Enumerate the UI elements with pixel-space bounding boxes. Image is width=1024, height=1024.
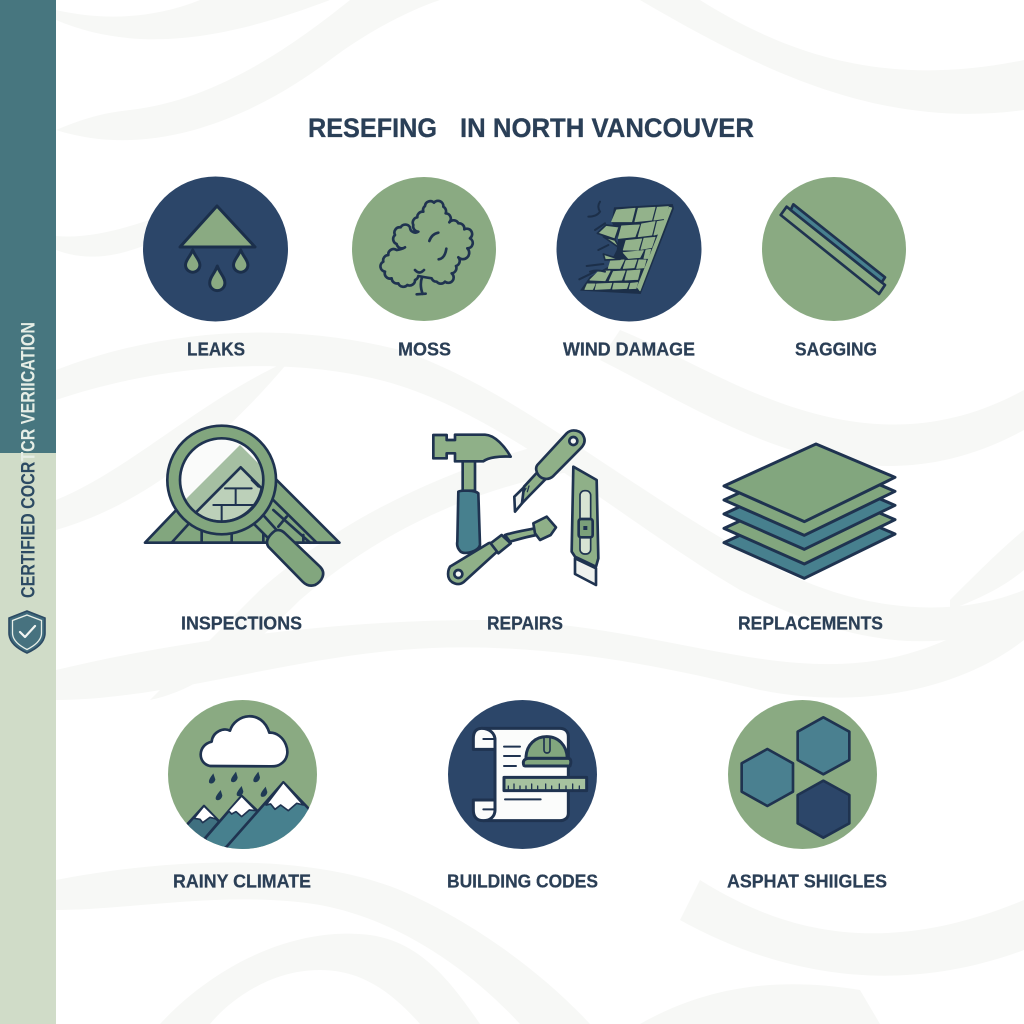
item: wind damage xyxy=(556,176,702,360)
title: RESEFING xyxy=(308,113,437,143)
item: repairs xyxy=(433,430,598,634)
label: repairs: REPAIRS xyxy=(487,614,563,634)
label: sagging: SAGGING xyxy=(795,340,877,360)
item: leaks xyxy=(143,176,288,360)
box cutter xyxy=(572,467,598,585)
icon: cloud rain and mountains xyxy=(168,700,317,857)
sidebar vertical text: CERTIFIED COCRTCR VERIICATION xyxy=(18,322,40,598)
label: moss: MOSS xyxy=(398,340,451,360)
label: inspections: INSPECTIONS xyxy=(181,614,302,634)
label: replacements: REPLACEMENTS xyxy=(738,614,883,634)
title xyxy=(308,113,754,143)
icon: moss tree xyxy=(352,177,496,321)
icon: torn shingles xyxy=(556,176,702,322)
item: replacements xyxy=(724,444,895,634)
icon: code scroll with hard hat and ruler xyxy=(448,700,597,849)
item: inspections xyxy=(145,426,339,634)
title: IN NORTH VANCOUVER xyxy=(460,113,754,143)
label: building codes: BUILDING CODES xyxy=(447,872,598,892)
icon: repair tools xyxy=(433,430,598,585)
icon: roof with water drops xyxy=(143,176,288,322)
label: leaks: LEAKS xyxy=(187,340,245,360)
sidebar: certified verification xyxy=(0,0,56,1024)
icon: hexagon shingles xyxy=(728,700,877,849)
label: rainy climate: RAINY CLIMATE xyxy=(173,872,311,892)
item: rainy climate xyxy=(168,700,317,892)
icon: sagging beam xyxy=(762,177,906,321)
item: asphalt shingles xyxy=(727,700,887,892)
label: asphalt shingles: ASPHAT SHIIGLES xyxy=(727,872,887,892)
icon: shield with check xyxy=(9,611,45,653)
hammer xyxy=(433,435,511,553)
item: moss xyxy=(352,177,496,360)
item: sagging xyxy=(762,177,906,360)
item: building codes xyxy=(447,700,598,892)
label: wind damage: WIND DAMAGE xyxy=(563,340,695,360)
icon: stacked shingle layers xyxy=(724,444,895,578)
utility knife, upper xyxy=(514,430,585,512)
chisel xyxy=(448,517,556,584)
icon: magnifier over roof xyxy=(145,426,339,586)
